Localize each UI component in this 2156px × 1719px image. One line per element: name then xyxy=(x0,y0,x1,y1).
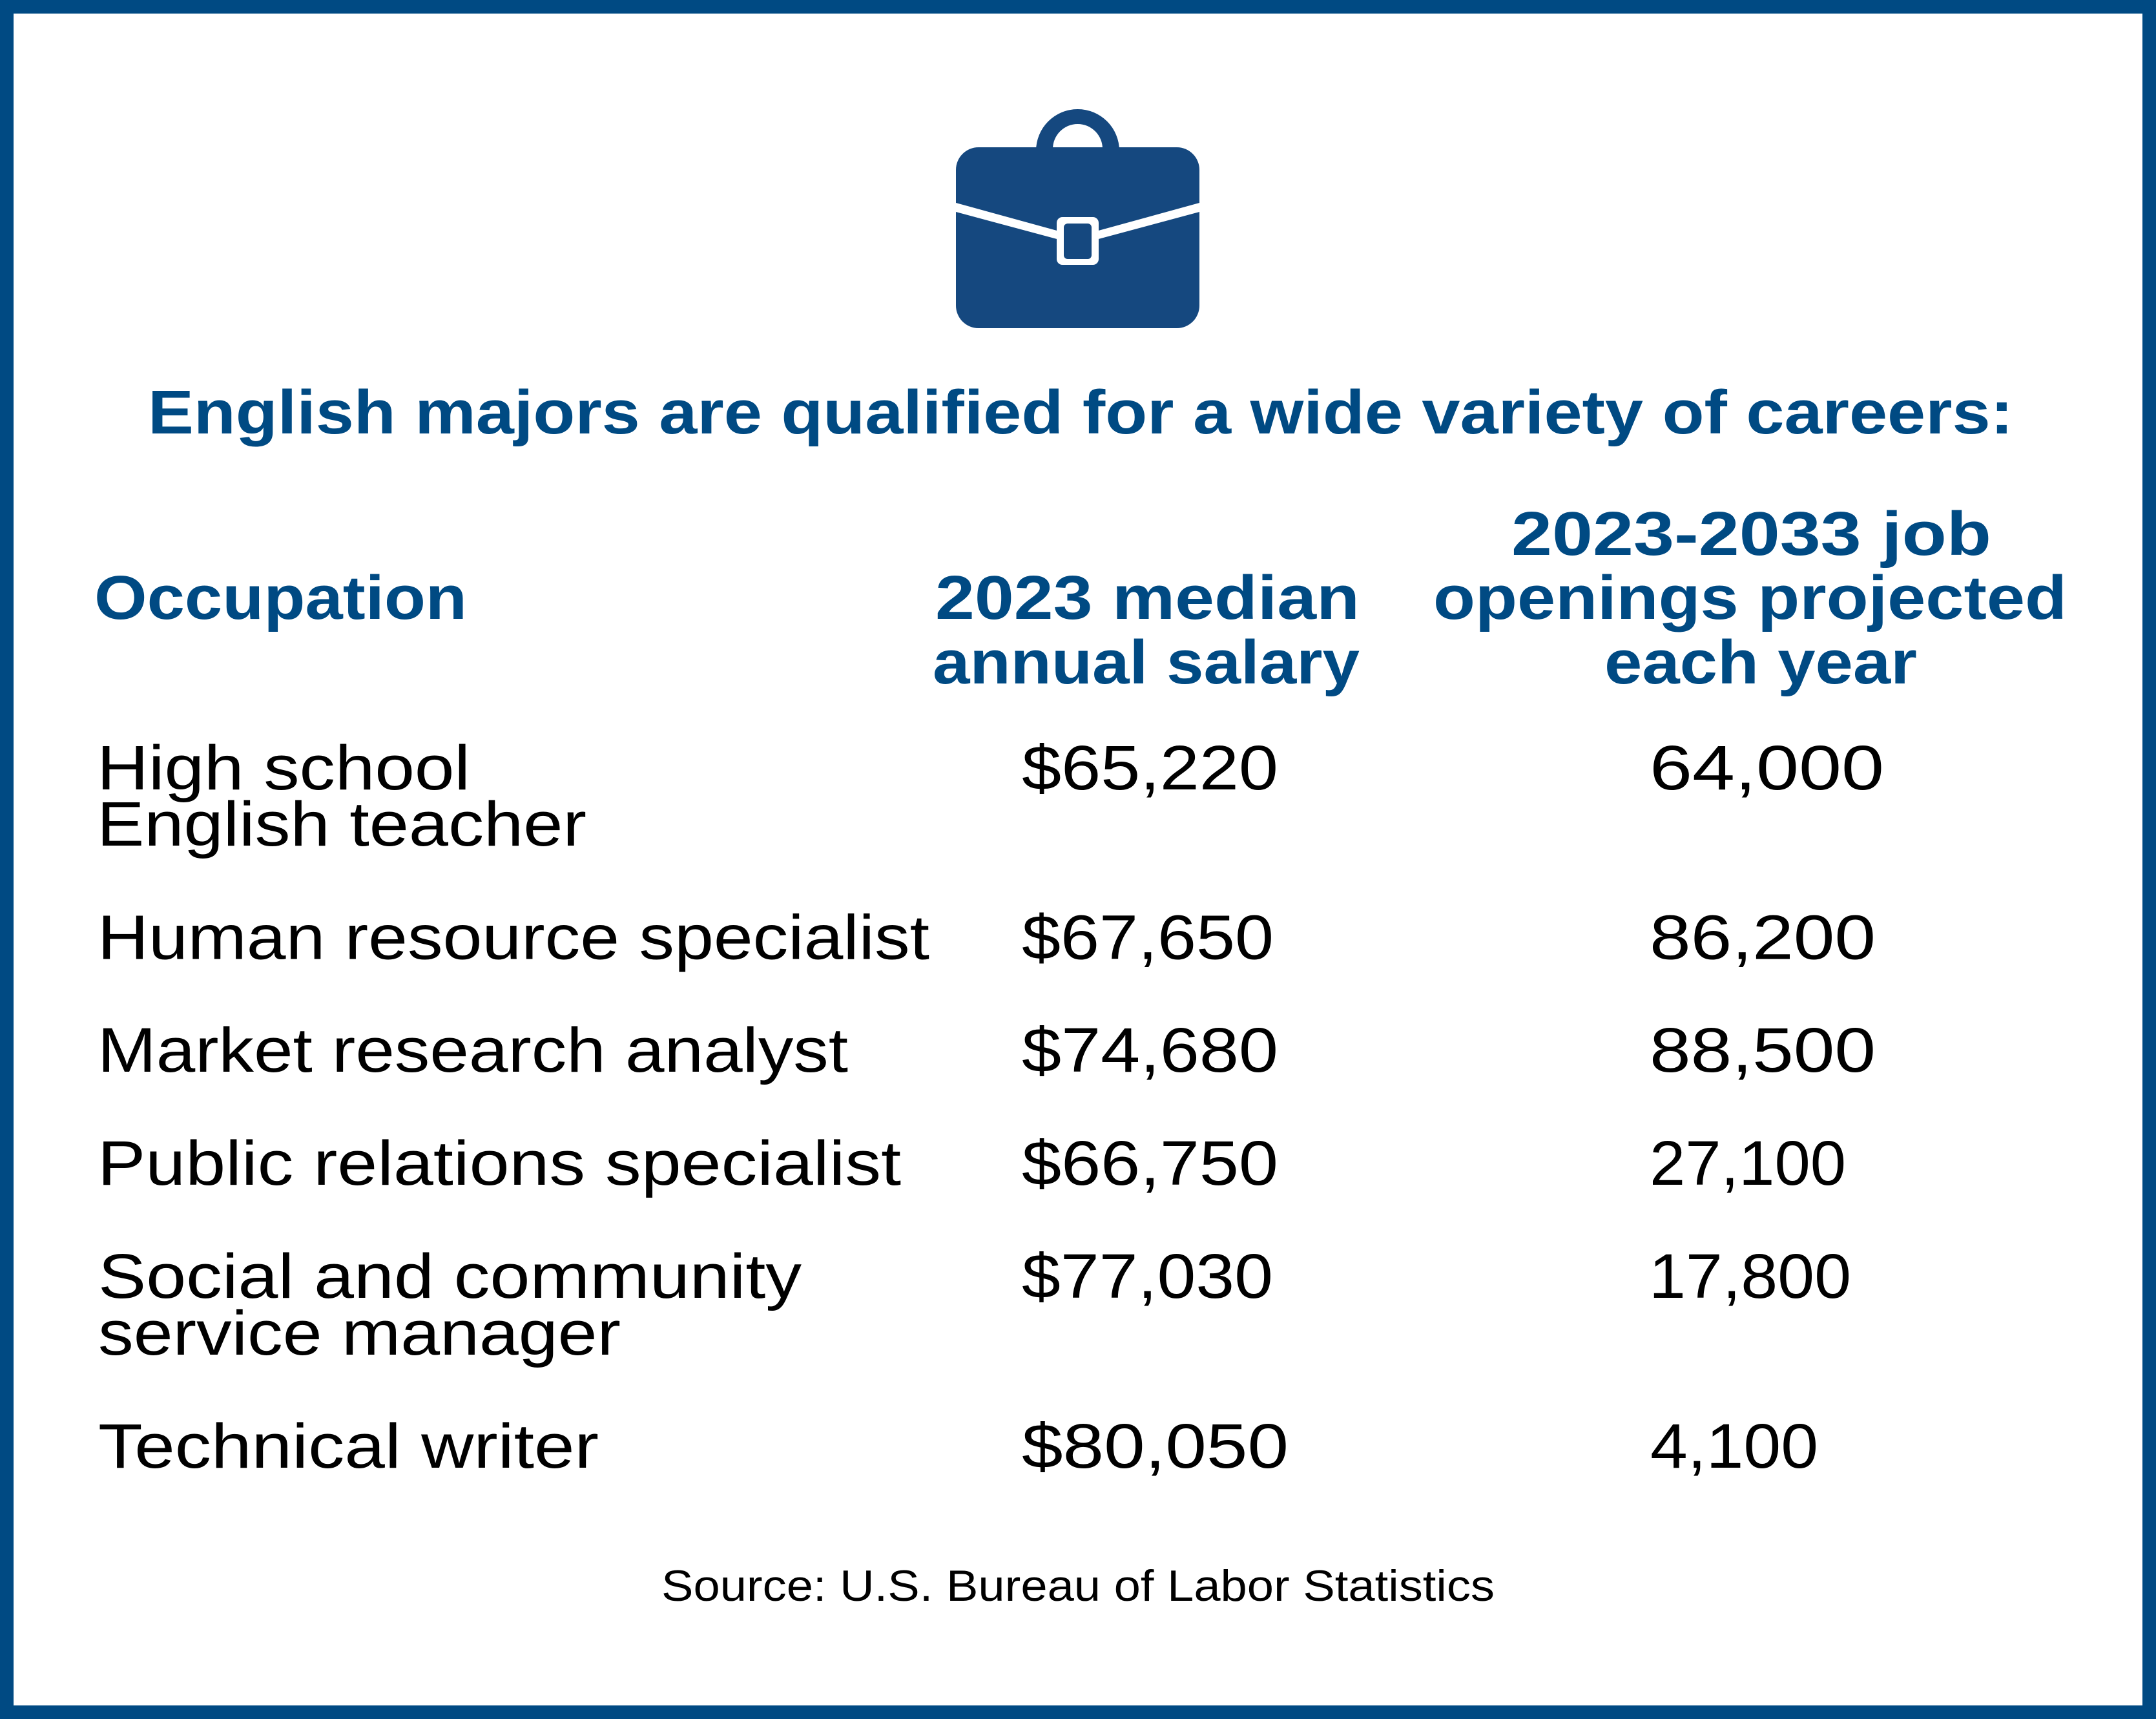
column heading: salary xyxy=(933,563,1360,697)
column heading: job openings xyxy=(1433,499,2067,697)
row: social and community service manager xyxy=(98,1241,1851,1368)
row: high school English teacher: High school xyxy=(97,733,470,803)
row: technical writer xyxy=(98,1411,1818,1481)
row: market research analyst: 88,500 xyxy=(1650,1015,1876,1085)
row: technical writer: 4,100 xyxy=(1650,1411,1818,1481)
row: public relations specialist: $66,750 xyxy=(1022,1128,1278,1198)
source note: Source: U.S. Bureau of Labor Statistics xyxy=(661,1561,1495,1610)
column heading: job openings: openings projected xyxy=(1433,563,2067,632)
column heading: salary: annual salary xyxy=(933,628,1360,697)
row: social and community service manager: Social and community xyxy=(98,1241,802,1311)
row: social and community service manager: 17,800 xyxy=(1649,1241,1851,1311)
row: human resource specialist xyxy=(98,902,1876,973)
column heading: job openings: 2023-2033 job xyxy=(1511,499,1991,568)
row: public relations specialist: 27,100 xyxy=(1650,1128,1846,1198)
row: high school English teacher xyxy=(97,733,1884,859)
row: human resource specialist: Human resource specialist xyxy=(98,902,929,973)
row: public relations specialist xyxy=(98,1128,1846,1198)
row: market research analyst xyxy=(98,1015,1876,1085)
row: high school English teacher: 64,000 xyxy=(1650,733,1884,803)
row: social and community service manager: service manager xyxy=(98,1298,621,1368)
row: market research analyst: $74,680 xyxy=(1022,1015,1278,1085)
column heading: job openings: each year xyxy=(1604,628,1917,697)
title: English majors are qualified for a wide variety of careers: xyxy=(148,378,2013,447)
row: public relations specialist: Public relations specialist xyxy=(98,1128,901,1198)
column heading: salary: 2023 median xyxy=(935,563,1360,632)
row: social and community service manager: $77,030 xyxy=(1022,1241,1273,1311)
column heading: occupation: Occupation xyxy=(94,563,467,632)
row: market research analyst: Market research analyst xyxy=(98,1015,848,1085)
row: technical writer: Technical writer xyxy=(98,1411,599,1481)
row: human resource specialist: $67,650 xyxy=(1022,902,1274,973)
row: high school English teacher: English teacher xyxy=(97,789,586,859)
row: high school English teacher: $65,220 xyxy=(1022,733,1278,803)
row: human resource specialist: 86,200 xyxy=(1650,902,1876,973)
row: technical writer: $80,050 xyxy=(1022,1411,1289,1481)
table xyxy=(94,499,2067,1481)
icon: briefcase xyxy=(956,109,1199,328)
